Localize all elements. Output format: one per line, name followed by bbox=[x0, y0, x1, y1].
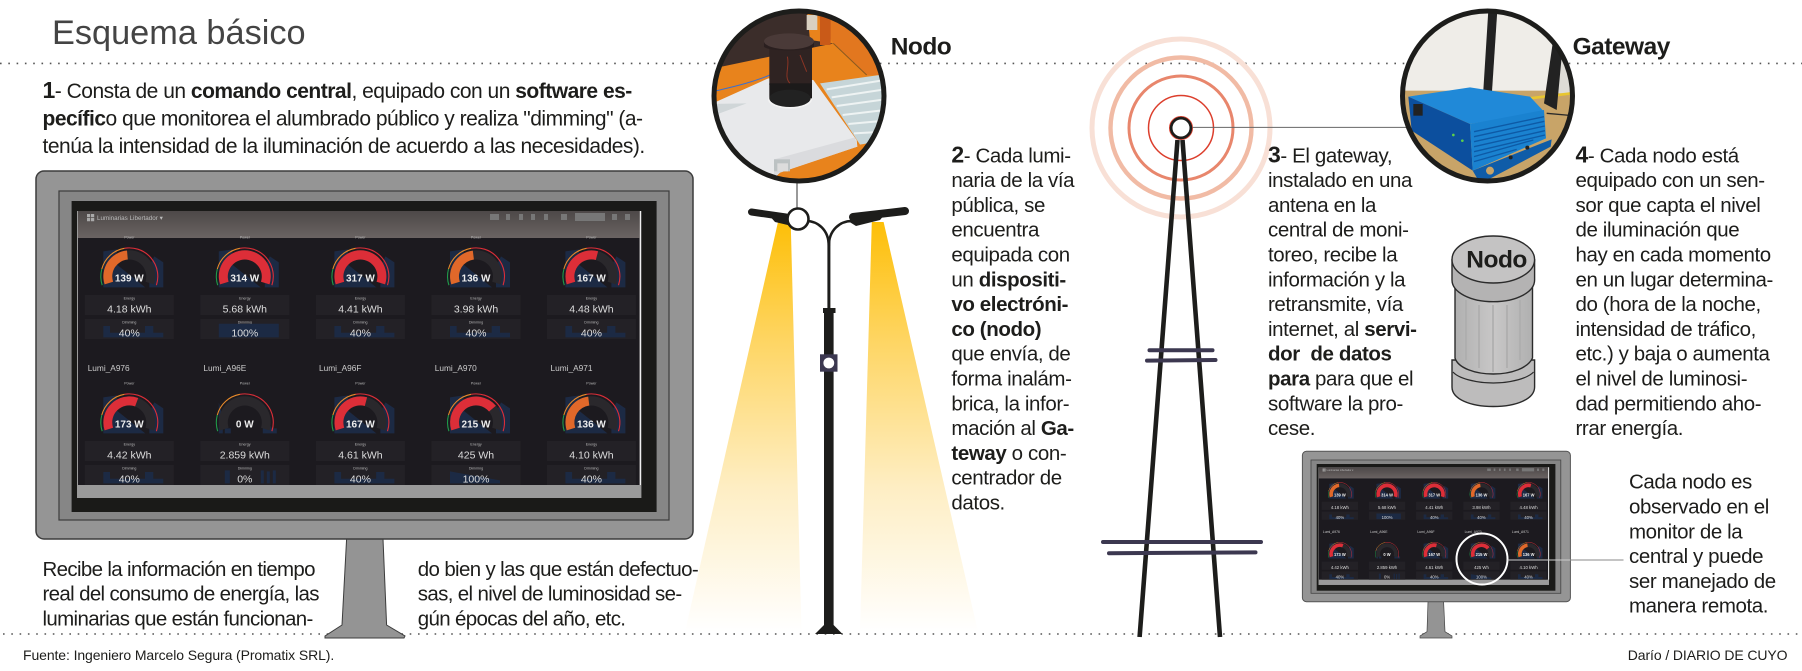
text block: remote monitoring note: manera remota. bbox=[1629, 595, 1768, 618]
signal rings bbox=[1092, 39, 1270, 217]
gauge panel 2 bbox=[200, 235, 289, 340]
small dashboard screen: 173 W bbox=[1334, 552, 1346, 557]
text block: monitor caption right: do bien y las que están defectuo- bbox=[418, 558, 698, 581]
gauge panel 6: 40% bbox=[119, 474, 140, 486]
text block: remote monitoring note: ser manejado de bbox=[1629, 570, 1776, 593]
text block: step 4: de iluminación que bbox=[1576, 219, 1739, 242]
small dashboard screen: 4.18 kWh bbox=[1331, 505, 1349, 510]
text block: remote monitoring note: central y puede bbox=[1629, 545, 1763, 568]
text block: step 2: equipada con bbox=[951, 244, 1070, 266]
small dashboard screen: 40% bbox=[1430, 515, 1439, 520]
gauge panel 9 bbox=[432, 381, 520, 486]
gauge panel 9: Dimming bbox=[469, 466, 483, 470]
gauge panel 2: 100% bbox=[231, 328, 258, 340]
gauge panel 1: 40% bbox=[119, 328, 140, 340]
gauge panel 4: Dimming bbox=[469, 320, 483, 324]
gauge panel 6: Dimming bbox=[122, 466, 136, 470]
gauge panel 3: Dimming bbox=[353, 320, 367, 324]
antenna tower bbox=[1092, 39, 1270, 637]
source credit: Fuente: Ingeniero Marcelo Segura (Promatix SRL). bbox=[23, 647, 334, 663]
gauge panel 6: 173 W bbox=[115, 420, 144, 431]
text block: step 3: toreo, recibe la bbox=[1268, 244, 1398, 266]
luminaire names: Lumi_A96E bbox=[203, 363, 247, 373]
photo: node device bbox=[712, 8, 886, 184]
gauge panel 7: 2.859 kWh bbox=[220, 450, 270, 462]
small dashboard screen: 40% bbox=[1430, 575, 1439, 580]
text block: step 4: intensidad de tráfico, bbox=[1576, 318, 1756, 341]
text block: step 4: do (hora de la noche, bbox=[1576, 293, 1761, 316]
small dashboard screen: 0% bbox=[1384, 575, 1390, 580]
gauge panel 9: Energy bbox=[470, 442, 482, 446]
gauge panel 10: Dimming bbox=[584, 466, 598, 470]
gauge panel 1: Energy bbox=[124, 296, 135, 300]
small dashboard screen: 4.42 kWh bbox=[1331, 565, 1349, 570]
small dashboard screen bbox=[1318, 467, 1549, 585]
gauge panel 7: 0 W bbox=[236, 420, 254, 431]
text block: step 2: pública, se bbox=[951, 194, 1045, 217]
text block: step 2: que envía, de bbox=[951, 343, 1070, 366]
gauge panel 10: Power bbox=[586, 381, 597, 385]
gauge panel 1: Dimming bbox=[122, 320, 136, 324]
gauge panel 4 bbox=[432, 235, 520, 340]
small dashboard screen: 317 W bbox=[1428, 492, 1440, 497]
small dashboard screen: 136 W bbox=[1523, 552, 1535, 557]
text block: step 2: brica, la infor- bbox=[951, 392, 1069, 415]
text block: step 2: datos. bbox=[951, 492, 1005, 514]
dashboard screen bbox=[77, 211, 641, 498]
text block: step 2: naria de la vía bbox=[951, 169, 1075, 192]
gauge panel 1: 4.18 kWh bbox=[107, 304, 152, 316]
small dashboard screen: Lumi_A971 bbox=[1512, 530, 1529, 534]
gauge panel 4: 40% bbox=[465, 328, 487, 340]
luminaire names: Lumi_A976 bbox=[88, 363, 130, 373]
text block: step 2: forma inalám- bbox=[951, 368, 1072, 390]
gauge panel 2: Energy bbox=[239, 296, 251, 300]
light cone right bbox=[860, 222, 978, 632]
gauge panel 8: 40% bbox=[350, 474, 371, 486]
text block: step 4: en un lugar determina- bbox=[1576, 268, 1773, 291]
text block: step 3: antena en la bbox=[1268, 194, 1377, 217]
small dashboard screen: 425 Wh bbox=[1474, 565, 1489, 570]
text block: step 4: hay en cada momento bbox=[1576, 244, 1771, 266]
gauge panel 10: Energy bbox=[586, 442, 597, 446]
highlight circle and callout line bbox=[1456, 534, 1624, 584]
luminaire names: Lumi_A971 bbox=[550, 363, 593, 373]
gauge panel 1: Power bbox=[124, 235, 135, 239]
gauge panel 4: 136 W bbox=[462, 274, 491, 285]
small dashboard screen: 4.48 kWh bbox=[1520, 505, 1538, 510]
text block: step 1: tenúa la intensidad de la iluminación de acuerdo a las necesidades). bbox=[42, 135, 645, 158]
small dashboard screen: 40% bbox=[1524, 575, 1533, 580]
small dashboard screen: Lumi_A970 bbox=[1465, 530, 1482, 534]
gauge panel 7: Power bbox=[240, 381, 251, 385]
gauge panel 5 bbox=[547, 235, 636, 340]
small dashboard screen: 2.859 kWh bbox=[1377, 565, 1398, 570]
small dashboard screen: Lumi_A976 bbox=[1323, 530, 1340, 534]
gauge panel 7: Energy bbox=[239, 442, 251, 446]
monitor frame bbox=[36, 171, 693, 539]
text block: step 2: vo electróni- bbox=[951, 293, 1068, 316]
small dashboard screen: 100% bbox=[1382, 515, 1393, 520]
small dashboard screen: Lumi_A96E bbox=[1370, 530, 1388, 534]
label: Nodo: Nodo bbox=[891, 33, 952, 60]
gauge panel 2: Dimming bbox=[238, 320, 252, 324]
text block: remote monitoring note: Cada nodo es bbox=[1629, 471, 1752, 494]
text block: step 4: sor que capta el nivel bbox=[1576, 194, 1760, 217]
small dashboard screen: 4.10 kWh bbox=[1520, 565, 1538, 570]
text block: step 3: cese. bbox=[1268, 417, 1315, 440]
text block: step 4: dad permitiendo aho- bbox=[1576, 392, 1761, 415]
text block: step 3: software la pro- bbox=[1268, 392, 1403, 415]
text block: step 3: retransmite, vía bbox=[1268, 293, 1404, 316]
gauge panel 2: 5.68 kWh bbox=[223, 304, 267, 316]
title: Esquema básico bbox=[52, 14, 306, 52]
small dashboard screen: 40% bbox=[1336, 575, 1344, 580]
small dashboard screen: 4.41 kWh bbox=[1425, 505, 1444, 510]
small dashboard screen: Lumi_A96F bbox=[1417, 530, 1435, 534]
text block: step 3: internet, al servi- bbox=[1268, 318, 1417, 341]
text block: step 4: etc.) y baja o aumenta bbox=[1576, 343, 1771, 366]
gauge panel 9: Power bbox=[471, 381, 482, 385]
luminaire names: Lumi_A970 bbox=[435, 363, 477, 373]
gauge panel 3: 317 W bbox=[346, 274, 375, 285]
label: Nodo on device: Nodo bbox=[1466, 247, 1527, 274]
gauge panel 8 bbox=[316, 381, 405, 486]
gauge panel 5: Dimming bbox=[584, 320, 598, 324]
gauge panel 9: 215 W bbox=[462, 420, 491, 431]
gauge panel 8: Energy bbox=[355, 442, 366, 446]
small dashboard screen: Luminarias Libertador ▾ bbox=[1327, 468, 1354, 472]
icon: node device bbox=[1452, 236, 1535, 406]
gauge panel 5: 4.48 kWh bbox=[569, 304, 614, 316]
text block: step 4: rrar energía. bbox=[1576, 417, 1683, 440]
text block: monitor caption left: real del consumo de energía, las bbox=[42, 583, 319, 606]
text block: monitor caption right: gún épocas del año, etc. bbox=[418, 607, 625, 630]
gauge panel 6 bbox=[85, 381, 174, 486]
text block: step 2: 2- Cada lumi- bbox=[951, 141, 1071, 167]
text block: step 3: dor de datos bbox=[1268, 343, 1392, 366]
text block: step 4: 4- Cada nodo está bbox=[1576, 141, 1739, 167]
text block: step 2: encuentra bbox=[951, 219, 1040, 242]
gauge panel 3: Energy bbox=[355, 296, 366, 300]
gauge panel 7: Dimming bbox=[238, 466, 252, 470]
gauge panel 4: Power bbox=[471, 235, 482, 239]
small dashboard screen: 3.98 kWh bbox=[1472, 505, 1491, 510]
small monitor bbox=[1302, 451, 1624, 638]
gauge panel 6: Energy bbox=[124, 442, 135, 446]
gauge panel 7 bbox=[200, 381, 289, 486]
gauge panel 9: 425 Wh bbox=[458, 450, 494, 462]
gauge panel 3: Power bbox=[355, 235, 366, 239]
text block: step 2: un dispositi- bbox=[951, 268, 1066, 291]
monitor stand bbox=[325, 539, 405, 638]
text block: step 1: 1- Consta de un comando central, equipado con un software es- bbox=[42, 77, 632, 103]
label: Gateway: Gateway bbox=[1573, 33, 1671, 60]
gauge panel 1: 139 W bbox=[115, 274, 144, 285]
text block: monitor caption right: sas, el nivel de luminosidad se- bbox=[418, 583, 682, 606]
small dashboard screen: 40% bbox=[1524, 515, 1533, 520]
text block: step 3: 3- El gateway, bbox=[1268, 141, 1392, 167]
text block: step 2: teway o con- bbox=[951, 442, 1066, 465]
dotted line: top bbox=[0, 62, 1802, 64]
text block: step 4: equipado con un sen- bbox=[1576, 169, 1765, 192]
gauge panel 1 bbox=[85, 235, 174, 340]
small dashboard screen: 5.68 kWh bbox=[1378, 505, 1397, 510]
gauge panel 10: 4.10 kWh bbox=[569, 450, 614, 462]
gauge panel 8: Power bbox=[355, 381, 366, 385]
dashboard header: Luminarias Libertador ▾ bbox=[97, 215, 163, 222]
text block: remote monitoring note: observado en el bbox=[1629, 496, 1769, 518]
gauge panel 8: 4.61 kWh bbox=[338, 450, 383, 462]
text block: step 3: información y la bbox=[1268, 268, 1406, 291]
text block: step 3: instalado en una bbox=[1268, 169, 1413, 192]
small dashboard screen: 167 W bbox=[1428, 552, 1440, 557]
gauge panel 5: 167 W bbox=[577, 274, 606, 285]
gauge panel 8: 167 W bbox=[346, 420, 375, 431]
gauge panel 5: Energy bbox=[586, 296, 597, 300]
text block: step 4: el nivel de luminosi- bbox=[1576, 368, 1747, 390]
text block: step 2: co (nodo) bbox=[951, 318, 1041, 341]
gauge panel 4: 3.98 kWh bbox=[454, 304, 498, 316]
large monitor bbox=[36, 171, 693, 638]
small dashboard screen: 167 W bbox=[1523, 492, 1535, 497]
small dashboard screen: 40% bbox=[1336, 515, 1344, 520]
small dashboard screen: 136 W bbox=[1476, 492, 1487, 497]
dashboard header bbox=[87, 213, 630, 222]
small dashboard screen: 4.61 kWh bbox=[1425, 565, 1444, 570]
gauge panel 2: Power bbox=[240, 235, 251, 239]
gauge panel 3 bbox=[316, 235, 405, 340]
text block: monitor caption left: luminarias que están funcionan- bbox=[42, 607, 313, 630]
gauge panel 10 bbox=[547, 381, 636, 486]
text block: step 3: central de moni- bbox=[1268, 219, 1409, 242]
gauge panel 5: 40% bbox=[581, 328, 602, 340]
gauge panel 5: Power bbox=[586, 235, 597, 239]
text block: monitor caption left: Recibe la información en tiempo bbox=[42, 558, 315, 581]
gauge panel 6: Power bbox=[124, 381, 135, 385]
small dashboard screen: 100% bbox=[1476, 575, 1487, 580]
small monitor stand bbox=[1420, 602, 1452, 638]
gauge panel 4: Energy bbox=[470, 296, 482, 300]
small monitor frame bbox=[1302, 451, 1570, 602]
small dashboard screen: 215 W bbox=[1476, 552, 1487, 557]
gauge panel 10: 136 W bbox=[577, 420, 606, 431]
light cone left bbox=[685, 222, 802, 632]
small dashboard screen: 0 W bbox=[1383, 552, 1391, 557]
gauge panel 2: 314 W bbox=[230, 274, 260, 285]
luminaire names bbox=[88, 363, 593, 373]
photo: gateway device bbox=[1400, 8, 1575, 184]
connector: antenna to gateway bbox=[1192, 126, 1406, 128]
text block: step 1: pecífico que monitorea el alumbrado público y realiza "dimming" (a- bbox=[42, 108, 643, 131]
text block: step 2: centrador de bbox=[951, 467, 1062, 490]
dotted line: bottom bbox=[3, 633, 1802, 635]
street lamp bbox=[752, 180, 905, 634]
gauge panel 3: 40% bbox=[350, 328, 371, 340]
text block: step 2: mación al Ga- bbox=[951, 417, 1074, 440]
gauge panel 10: 40% bbox=[581, 474, 602, 486]
small dashboard screen: 314 W bbox=[1381, 492, 1393, 497]
text block: step 3: para para que el bbox=[1268, 368, 1413, 390]
node box on pole bbox=[820, 354, 838, 372]
gauge panel 7: 0% bbox=[237, 474, 252, 486]
small dashboard screen: 139 W bbox=[1334, 492, 1346, 497]
author credit: Darío / DIARIO DE CUYO bbox=[1628, 647, 1788, 663]
gauge panel 9: 100% bbox=[463, 474, 489, 486]
gauge panel 8: Dimming bbox=[353, 466, 367, 470]
small dashboard screen: 40% bbox=[1477, 515, 1486, 520]
text block: remote monitoring note: monitor de la bbox=[1629, 520, 1743, 543]
luminaire names: Lumi_A96F bbox=[319, 363, 361, 373]
gauge panel 3: 4.41 kWh bbox=[338, 304, 383, 316]
gauge panel 6: 4.42 kWh bbox=[107, 450, 152, 462]
